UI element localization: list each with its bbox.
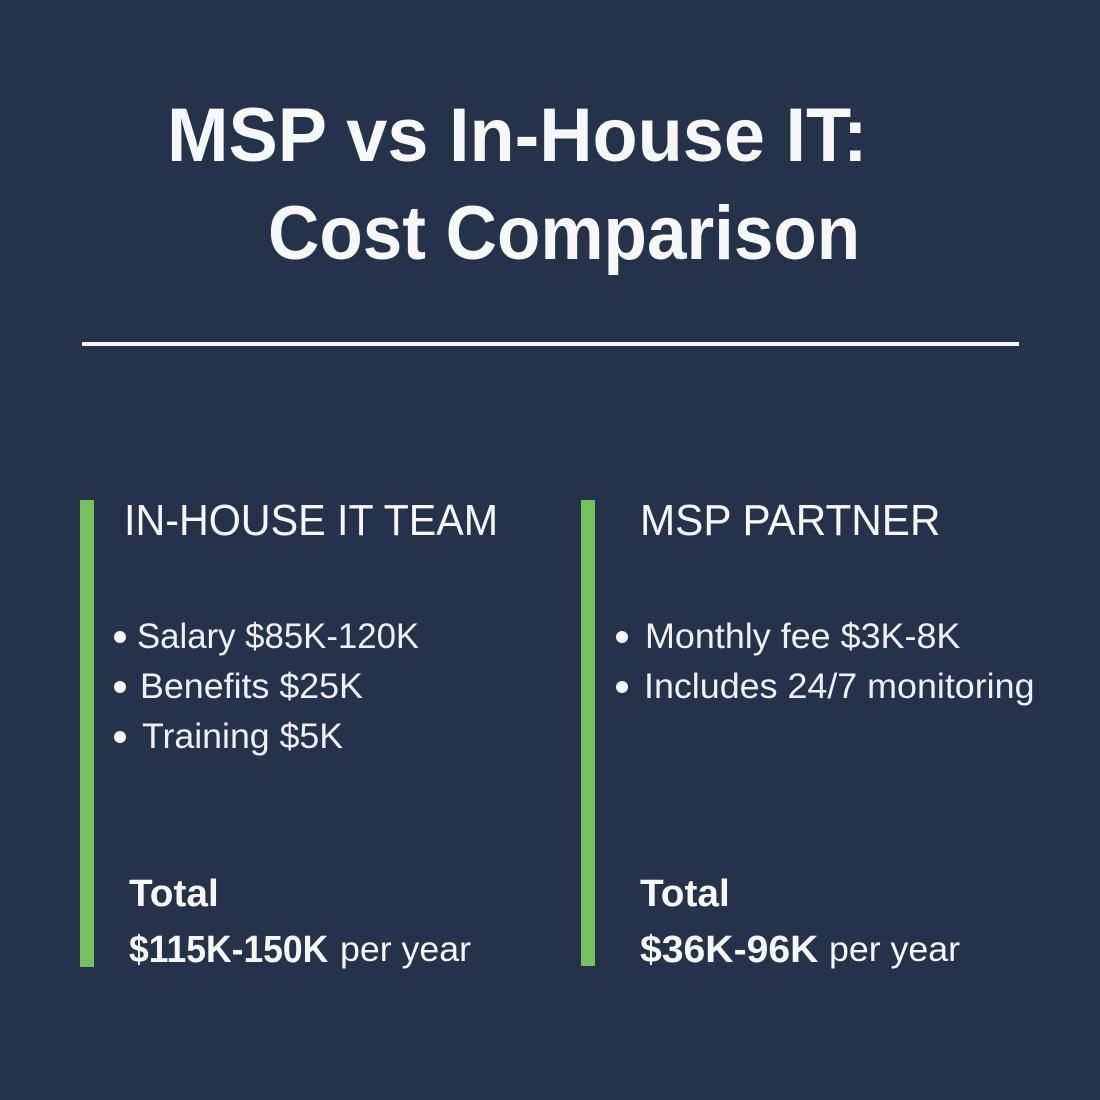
cost list: Training $5K [142,717,343,756]
title [167,93,868,276]
cost list [616,617,1034,706]
total: $115K-150K [129,929,328,971]
total: Total [640,873,730,915]
panel: MSP partner [581,496,1034,971]
cost list: Includes 24/7 monitoring [644,667,1034,706]
total: Total [129,873,219,915]
total: per year [829,930,960,969]
panel: in-house IT team [80,496,498,971]
panel accent bar [581,500,595,966]
cost list: Salary $85K-120K [137,617,419,656]
cost list: Monthly fee $3K-8K [645,617,960,656]
heading: in-house: IN-HOUSE IT TEAM [124,496,498,545]
title: MSP vs In-House IT: [167,93,868,178]
total [640,873,960,971]
cost list: Benefits $25K [140,667,363,706]
total: $36K-96K [640,929,818,971]
panel accent bar [80,500,94,967]
total: per year [340,930,471,969]
cost list [114,617,419,756]
title: Cost Comparison [268,191,860,276]
total [129,873,471,971]
heading: MSP: MSP PARTNER [640,496,940,545]
